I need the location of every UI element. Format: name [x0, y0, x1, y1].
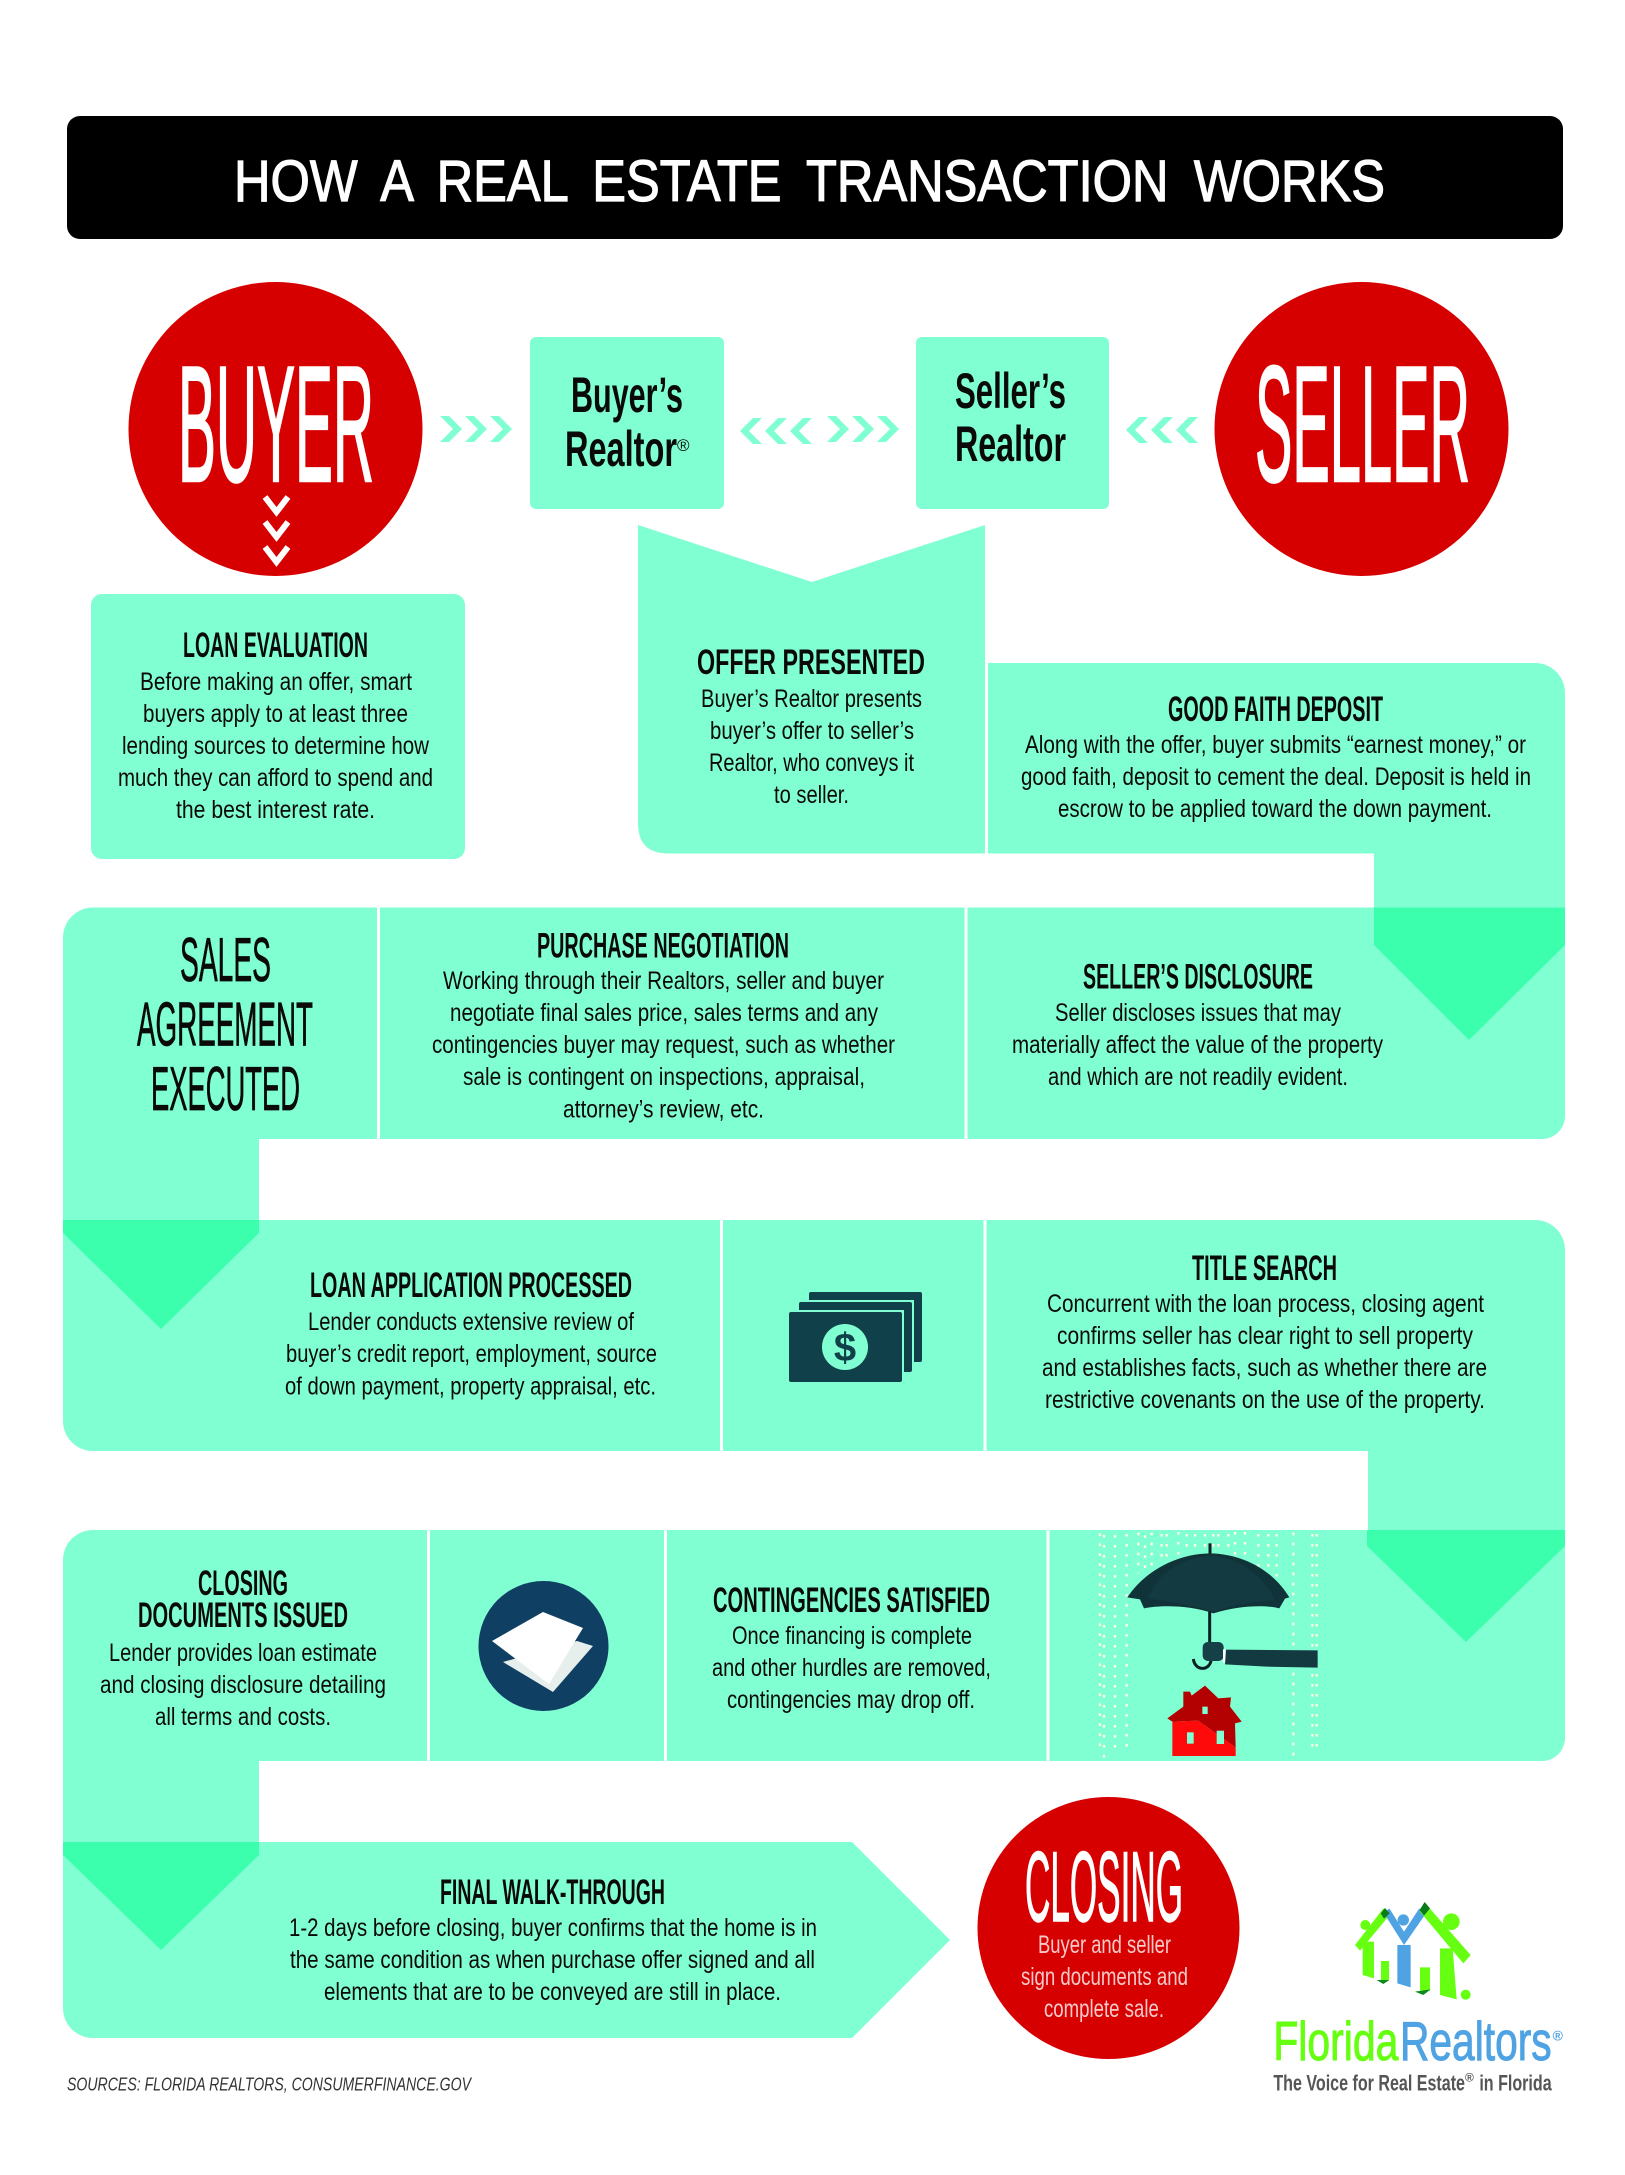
flow band connecting all steps	[63, 663, 1565, 2038]
panel: contingencies satisfied: CONTINGENCIES SATISFIED	[713, 1581, 990, 1620]
closing circle: sign documents and	[1021, 1963, 1188, 1991]
panel: loan evaluation: LOAN EVALUATION	[183, 626, 368, 665]
arrow: seller to seller's realtor	[1126, 417, 1198, 443]
panel: purchase negotiation: negotiate final sales price, sales terms and any	[450, 999, 878, 1027]
logo: Florida Realtors: ®	[1553, 2028, 1564, 2044]
panel: purchase negotiation: contingencies buyer may request, such as whether	[432, 1031, 895, 1059]
text: AGREEMENT	[137, 990, 313, 1060]
panel: loan application processed: of down payment, property appraisal, etc.	[285, 1372, 656, 1400]
closing circle: complete sale.	[1044, 1995, 1164, 2023]
panel: closing documents issued: all terms and costs.	[155, 1703, 331, 1731]
heading: sales agreement executed	[137, 926, 313, 1124]
panel: seller's disclosure: and which are not readily evident.	[1048, 1063, 1348, 1091]
seller circle	[1214, 282, 1508, 576]
panel: contingencies satisfied: contingencies may drop off.	[727, 1686, 975, 1714]
closing circle	[978, 1797, 1240, 2059]
icon: umbrella, hand and house in rain	[1100, 1532, 1318, 1758]
panel: offer presented: OFFER PRESENTED	[697, 643, 925, 682]
logo: Florida Realtors	[1273, 1902, 1564, 2096]
logo: Florida Realtors: Florida	[1273, 2010, 1399, 2072]
panel: offer presented: buyer’s offer to seller’s	[710, 717, 914, 745]
panel: seller's disclosure: materially affect the value of the property	[1012, 1031, 1383, 1059]
buyer circle	[128, 282, 422, 576]
panel: offer presented: Realtor, who conveys it	[709, 749, 914, 777]
panel: purchase negotiation: Working through their Realtors, seller and buyer	[443, 967, 884, 995]
panel: purchase negotiation: PURCHASE NEGOTIATION	[537, 926, 789, 966]
buyer's realtor box: Buyer’s	[571, 367, 683, 423]
panel: title search	[1042, 1249, 1487, 1414]
panel: closing documents issued: DOCUMENTS ISSUED	[138, 1596, 348, 1635]
panel: offer presented	[638, 525, 985, 854]
panel: closing documents issued: and closing disclosure detailing	[100, 1671, 386, 1699]
icon: money stack: $	[834, 1326, 856, 1370]
panel: good faith deposit: escrow to be applied toward the down payment.	[1058, 795, 1492, 823]
panel: loan evaluation: Before making an offer, smart	[140, 668, 412, 696]
panel: contingencies satisfied	[712, 1581, 991, 1714]
panel: contingencies satisfied: Once financing is complete	[732, 1622, 972, 1650]
arrow: buyer to buyer's realtor	[440, 416, 512, 442]
panel: good faith deposit: GOOD FAITH DEPOSIT	[1168, 690, 1383, 729]
arrow: to contingencies row	[1367, 1530, 1565, 1642]
panel: seller's disclosure: SELLER’S DISCLOSURE	[1083, 958, 1313, 996]
panel: final walk-through: the same condition as when purchase offer signed and all	[290, 1946, 815, 1974]
panel: purchase negotiation: sale is contingent on inspections, appraisal,	[463, 1063, 865, 1091]
logo: Florida Realtors: in Florida	[1479, 2071, 1552, 2096]
panel: final walk-through	[289, 1873, 817, 2006]
panel: final walk-through: FINAL WALK-THROUGH	[440, 1873, 665, 1912]
panel: loan application processed: Lender conducts extensive review of	[308, 1308, 634, 1336]
arrow: realtors exchange right	[827, 416, 899, 442]
buyer's realtor box	[530, 337, 724, 509]
panel: closing documents issued: Lender provides loan estimate	[109, 1639, 377, 1667]
title: HOW A REAL ESTATE TRANSACTION WORKS	[234, 149, 1385, 214]
arrow: to loan application	[63, 1220, 259, 1329]
panel: final walk-through: elements that are to be conveyed are still in place.	[324, 1978, 781, 2006]
panel: title search: TITLE SEARCH	[1192, 1249, 1337, 1288]
panel: loan evaluation: lending sources to determine how	[122, 732, 430, 760]
panel: purchase negotiation	[432, 926, 895, 1124]
panel: purchase negotiation: attorney’s review, etc.	[563, 1096, 764, 1124]
arrow: to final walk-through	[63, 1842, 259, 1950]
panel: title search: restrictive covenants on the use of the property.	[1045, 1386, 1485, 1414]
panel: seller's disclosure: Seller discloses issues that may	[1055, 999, 1341, 1027]
panel: loan application processed: buyer’s credit report, employment, source	[286, 1340, 657, 1368]
logo: Florida Realtors: ®	[1465, 2071, 1474, 2085]
panel: offer presented: to seller.	[774, 781, 849, 809]
seller's realtor box: Seller’s	[955, 363, 1066, 419]
panel: closing documents issued	[100, 1564, 386, 1731]
text: BUYER	[178, 332, 374, 516]
text: EXECUTED	[151, 1055, 300, 1124]
panel: title search: confirms seller has clear right to sell property	[1057, 1322, 1473, 1350]
heading: sales agreement executed: SALES	[180, 926, 271, 995]
logo: Florida Realtors: The Voice for Real Estate	[1273, 2071, 1465, 2096]
panel: good faith deposit	[1021, 690, 1531, 823]
buyer's realtor box: ®	[677, 436, 690, 455]
panel: loan evaluation: buyers apply to at least three	[143, 700, 408, 728]
text: CLOSING	[1025, 1831, 1183, 1942]
seller's realtor box	[916, 337, 1109, 509]
panel: good faith deposit: good faith, deposit to cement the deal. Deposit is held in	[1021, 763, 1531, 791]
panel: final walk-through: 1-2 days before closing, buyer confirms that the home is in	[289, 1914, 817, 1942]
panel: loan application processed	[285, 1266, 657, 1400]
panel: loan evaluation: the best interest rate.	[176, 796, 375, 824]
panel: title search: Concurrent with the loan process, closing agent	[1047, 1290, 1484, 1318]
panel: offer presented: Buyer’s Realtor presents	[701, 685, 922, 713]
panel: closing documents issued: CLOSING	[198, 1564, 288, 1603]
panel: loan evaluation: much they can afford to spend and	[118, 764, 433, 792]
title	[67, 116, 1563, 239]
panel: contingencies satisfied: and other hurdles are removed,	[712, 1654, 991, 1682]
icon: documents	[478, 1581, 608, 1711]
sources: SOURCES: FLORIDA REALTORS, CONSUMERFINANCE.GOV	[67, 2074, 473, 2094]
arrow: realtors exchange left	[740, 418, 812, 444]
icon: money stack	[787, 1292, 922, 1384]
panel: good faith deposit: Along with the offer, buyer submits “earnest money,” or	[1025, 731, 1526, 759]
closing circle: Buyer and seller	[1038, 1931, 1171, 1959]
panel: loan evaluation	[91, 594, 465, 859]
arrow: to seller's disclosure	[1374, 908, 1565, 1040]
panel: loan application processed: LOAN APPLICATION PROCESSED	[310, 1266, 632, 1305]
panel: seller's disclosure	[1012, 958, 1383, 1091]
buyer's realtor box: Realtor	[565, 421, 677, 477]
seller's realtor box: Realtor	[955, 416, 1066, 472]
panel: title search: and establishes facts, such as whether there are	[1042, 1354, 1487, 1382]
logo: Florida Realtors: Realtors	[1400, 2010, 1552, 2072]
